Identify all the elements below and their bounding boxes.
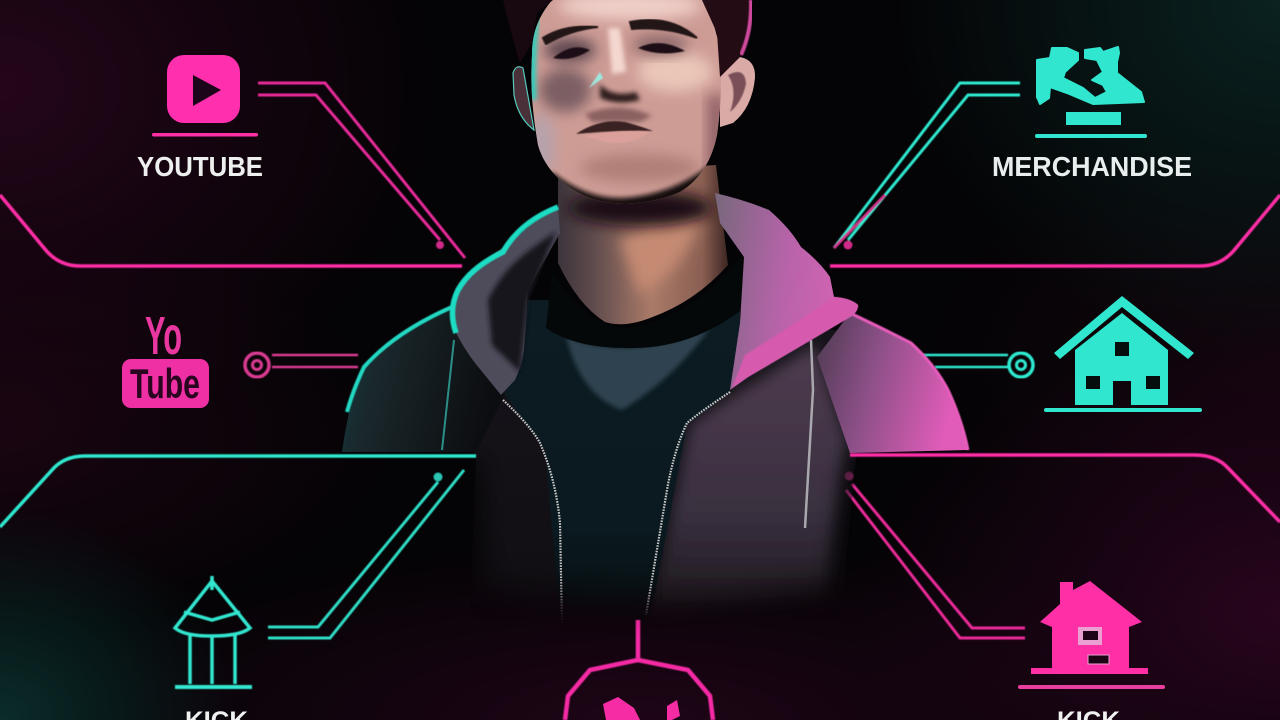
right eyebrow	[630, 20, 697, 38]
right edge shade	[708, 95, 724, 195]
left ear	[513, 67, 534, 130]
t-shirt light fold	[566, 328, 710, 410]
hood right pink fold	[732, 297, 858, 388]
connector: kick tower lines	[268, 470, 464, 638]
jacket torso with fade	[474, 300, 856, 626]
t-shirt	[505, 300, 740, 626]
hood right	[715, 193, 858, 390]
connector: long pink line upper left	[0, 195, 462, 266]
connector: Yo Tube target lines	[245, 353, 358, 377]
person: creator portrait	[342, 0, 968, 640]
hood left rim light	[452, 207, 558, 333]
icon: bottom centre octagon	[565, 620, 713, 720]
moustache shadow	[585, 107, 652, 122]
left zipper	[503, 400, 562, 625]
divider under YouTube icon	[152, 133, 258, 136]
left cheek shadow	[539, 68, 591, 112]
divider under merchandise icon	[1035, 134, 1147, 138]
right drawstring	[805, 340, 813, 528]
icon: teal house	[1044, 296, 1202, 412]
left drawstring	[442, 340, 454, 450]
hood left dark lining	[488, 232, 556, 372]
jacket body	[474, 330, 856, 586]
connector: kick house lines	[844, 472, 1025, 638]
face rim teal	[533, 8, 538, 100]
right ear	[720, 57, 755, 127]
icon: Yo Tube logo: Yo	[145, 306, 182, 366]
icon: YouTube play button	[167, 55, 240, 123]
icon: pink kick house	[1018, 581, 1165, 689]
connector: long pink line upper right	[830, 195, 1280, 266]
face base	[525, 0, 725, 210]
t-shirt collar	[546, 255, 744, 348]
left eye socket	[544, 38, 596, 62]
right eye	[638, 43, 685, 53]
nose glint	[589, 72, 603, 88]
right shoulder rim light	[850, 313, 968, 450]
right eye socket	[632, 35, 688, 55]
upper lip	[576, 121, 653, 134]
beard shadow	[552, 164, 706, 204]
right ear shadow	[728, 72, 746, 112]
icon: Yo Tube logo: Tube	[130, 360, 200, 407]
left eye	[553, 47, 590, 59]
right cheek highlight	[637, 52, 713, 92]
right shoulder	[817, 313, 968, 453]
nose shadow	[600, 84, 640, 103]
face	[525, 0, 725, 210]
nose highlight	[608, 28, 626, 74]
hair left	[503, 0, 553, 63]
label: YouTube: YOUTUBE	[137, 151, 263, 182]
hair right	[702, 0, 753, 77]
neck	[558, 165, 728, 324]
left shoulder rim light	[347, 307, 452, 412]
icon: merchandise boot	[1037, 47, 1144, 125]
connector: long teal line lower left	[0, 456, 476, 527]
icon: Yo Tube logo	[122, 306, 209, 408]
hair pink rim	[741, 0, 751, 55]
lower lip	[585, 131, 650, 143]
forehead highlight	[558, 0, 702, 20]
jacket right panel	[650, 345, 846, 620]
left jaw light	[534, 114, 556, 172]
icon: kick tower	[175, 576, 252, 687]
connector: long pink line lower right	[850, 455, 1280, 522]
neck centre highlight	[620, 215, 700, 295]
label: merchandise: MERCHANDISE	[992, 151, 1192, 182]
neck rim light	[557, 186, 559, 262]
chin shade	[580, 154, 700, 182]
under chin shadow	[568, 190, 712, 226]
left shoulder	[342, 307, 505, 452]
connector: merchandise lines to centre	[834, 83, 1020, 250]
connector: YouTube lines to centre	[258, 83, 465, 258]
right zipper	[646, 392, 730, 615]
connector: house target lines	[920, 353, 1033, 377]
left eyebrow	[543, 26, 598, 44]
hood left	[452, 207, 560, 395]
